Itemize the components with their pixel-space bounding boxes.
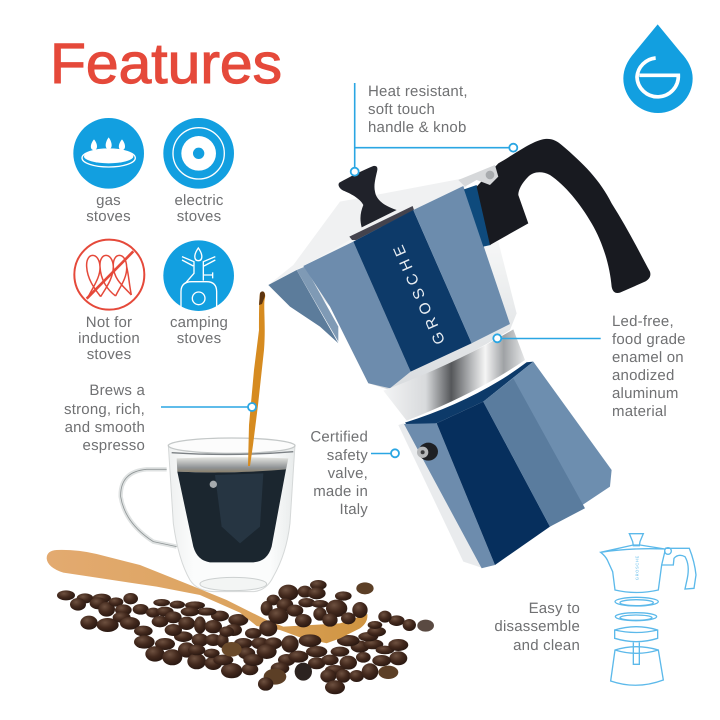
icon: disassembled pot line drawing	[601, 534, 696, 685]
callout: handle and knob: soft touch	[368, 101, 435, 118]
label: not for induction stoves: induction	[78, 330, 140, 347]
callout: handle and knob	[351, 83, 517, 176]
safety valve	[417, 443, 438, 461]
silver ring	[383, 329, 525, 421]
text: easy to disassemble: Easy to	[529, 600, 580, 617]
label: electric stoves: stoves	[177, 208, 221, 225]
handle	[121, 469, 177, 547]
brand name on pot: GROSCHE	[390, 243, 448, 347]
label: electric stoves: electric	[174, 192, 224, 209]
pot lid	[268, 178, 467, 285]
title: Features	[50, 32, 282, 96]
callout: brews espresso: Brews a	[89, 382, 145, 399]
pot knob	[339, 166, 397, 227]
callout: brews espresso: and smooth	[65, 419, 145, 436]
callout: safety valve: valve,	[328, 465, 368, 482]
callout: safety valve: Italy	[339, 501, 368, 518]
wooden spoon	[47, 550, 367, 643]
callout: enamel: food grade	[612, 331, 686, 348]
upper left spout facet	[268, 270, 338, 343]
label: not for induction stoves: Not for	[86, 314, 132, 331]
text: easy to disassemble: and clean	[513, 637, 580, 654]
callout: enamel: enamel on	[612, 349, 684, 366]
callout: safety valve: made in	[313, 483, 368, 500]
callout: brews espresso	[64, 382, 256, 454]
text: easy to disassemble: disassemble	[494, 618, 580, 635]
callout: enamel: Led-free,	[612, 313, 674, 330]
label: not for induction stoves: stoves	[87, 346, 131, 363]
icon: not for induction stoves	[74, 240, 144, 310]
lower dark band	[437, 402, 550, 565]
illustration: coffee stream	[248, 291, 265, 466]
callout: brews espresso: strong, rich,	[64, 401, 145, 418]
pot handle	[477, 139, 650, 293]
callout: brews espresso: espresso	[83, 437, 145, 454]
label: camping stoves: stoves	[177, 330, 221, 347]
callout: handle and knob: handle & knob	[368, 119, 467, 136]
callout: enamel: aluminum	[612, 385, 679, 402]
callout: safety valve	[310, 428, 399, 518]
brand name on line drawing: GROSCHE	[635, 555, 639, 580]
upper facet by handle	[464, 185, 491, 247]
callout: safety valve: Certified	[310, 428, 368, 446]
crema	[177, 457, 288, 473]
lower facet left	[404, 423, 495, 568]
upper facet right	[413, 186, 510, 343]
callout: safety valve: safety	[327, 447, 368, 464]
callout: handle and knob: Heat resistant,	[368, 83, 468, 100]
upper dark band	[353, 210, 472, 372]
label: camping stoves: camping	[170, 314, 228, 331]
lower dark rim	[405, 362, 533, 428]
callout: enamel	[493, 313, 686, 420]
illustration: coffee beans and spoon	[47, 550, 434, 694]
handle hinge	[458, 165, 498, 187]
label: gas stoves: gas	[96, 192, 121, 209]
icon: electric stoves	[163, 118, 234, 189]
coffee	[177, 469, 286, 562]
upper silver parts	[297, 240, 517, 390]
upper facet left	[303, 242, 411, 388]
illustration: glass cup	[121, 438, 295, 592]
icon: camping stoves	[163, 240, 234, 311]
label: gas stoves: stoves	[86, 208, 131, 225]
lower facet right	[483, 362, 612, 527]
illustration: moka pot	[268, 139, 650, 568]
callout: enamel: material	[612, 403, 667, 420]
icon: brand water drop logo	[623, 24, 693, 113]
icon: gas stoves	[73, 118, 144, 189]
lower silver edge	[398, 423, 483, 568]
callout: enamel: anodized	[612, 367, 674, 384]
